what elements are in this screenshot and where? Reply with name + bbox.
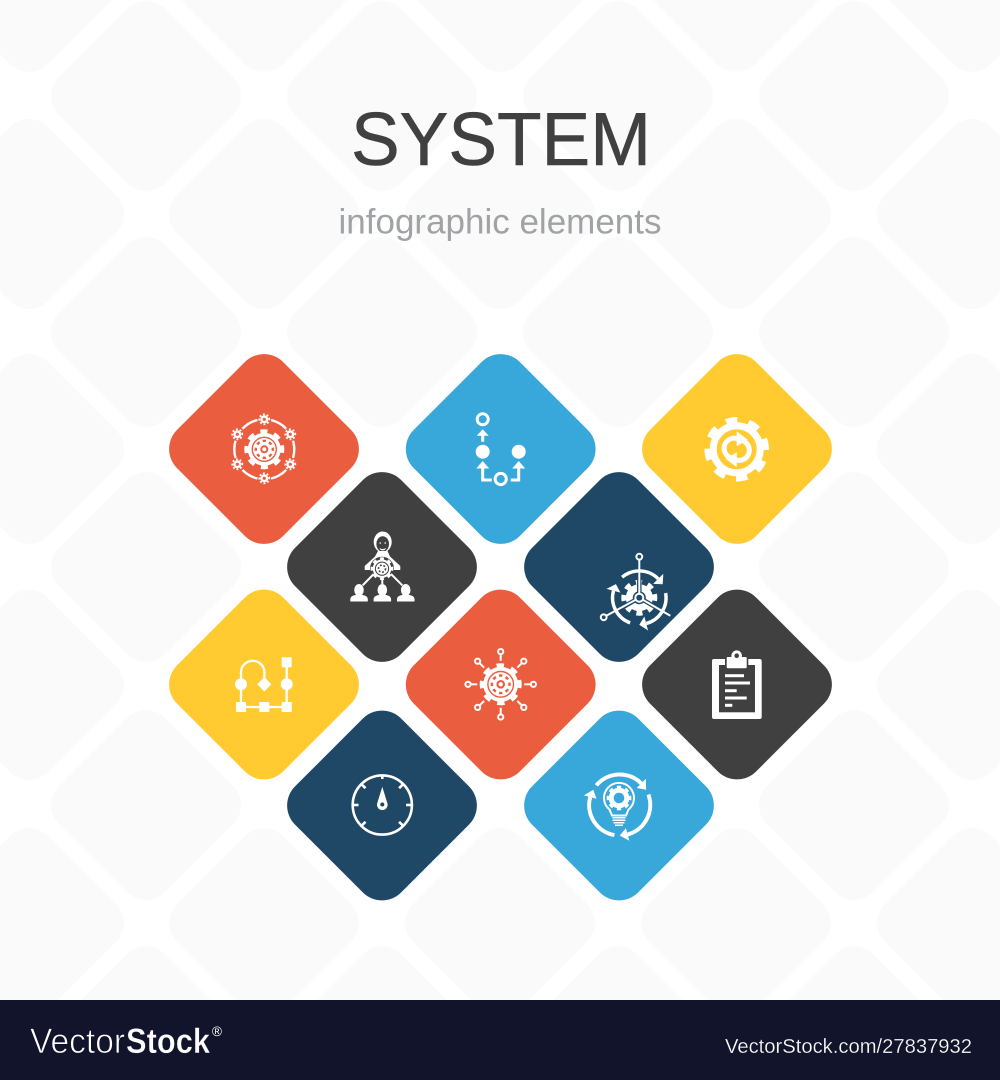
panel: yellow flowchart: [158, 578, 370, 791]
icon: gear with three spokes and arrows: [601, 554, 671, 632]
footer logo: ®: [212, 1024, 222, 1039]
icon: gear with connected nodes: [465, 649, 536, 720]
subtitle: infographic elements: [339, 202, 661, 242]
footer image id: VectorStock.com/27837932: [725, 1036, 972, 1058]
panel: dark management: [276, 461, 488, 673]
icon: gear with refresh arrows: [703, 416, 770, 483]
panel: orange gear cluster: [158, 343, 370, 555]
panel: blue process flow: [395, 343, 607, 555]
footer logo: Stock: [126, 1022, 210, 1061]
icon: central gear with satellites: [232, 414, 295, 483]
panel: orange gear hub: [395, 578, 607, 791]
footer bar: [0, 1000, 1000, 1080]
icon: manager with gear and team: [350, 532, 414, 602]
icon: nodes and arrows: [476, 414, 526, 485]
icon: speedometer: [352, 775, 412, 835]
panel: navy system cycle: [513, 461, 725, 673]
panel: yellow gear refresh: [631, 343, 843, 555]
panel: navy gauge: [276, 699, 488, 912]
title: SYSTEM: [351, 97, 651, 181]
icon: clipboard: [712, 650, 762, 719]
icon: light bulb with gear and cycle arrows: [580, 774, 658, 843]
panel: blue idea cycle: [513, 699, 725, 912]
panel: dark clipboard: [631, 578, 843, 791]
icon: flowchart: [235, 657, 293, 712]
footer logo: Vector: [30, 1022, 125, 1061]
